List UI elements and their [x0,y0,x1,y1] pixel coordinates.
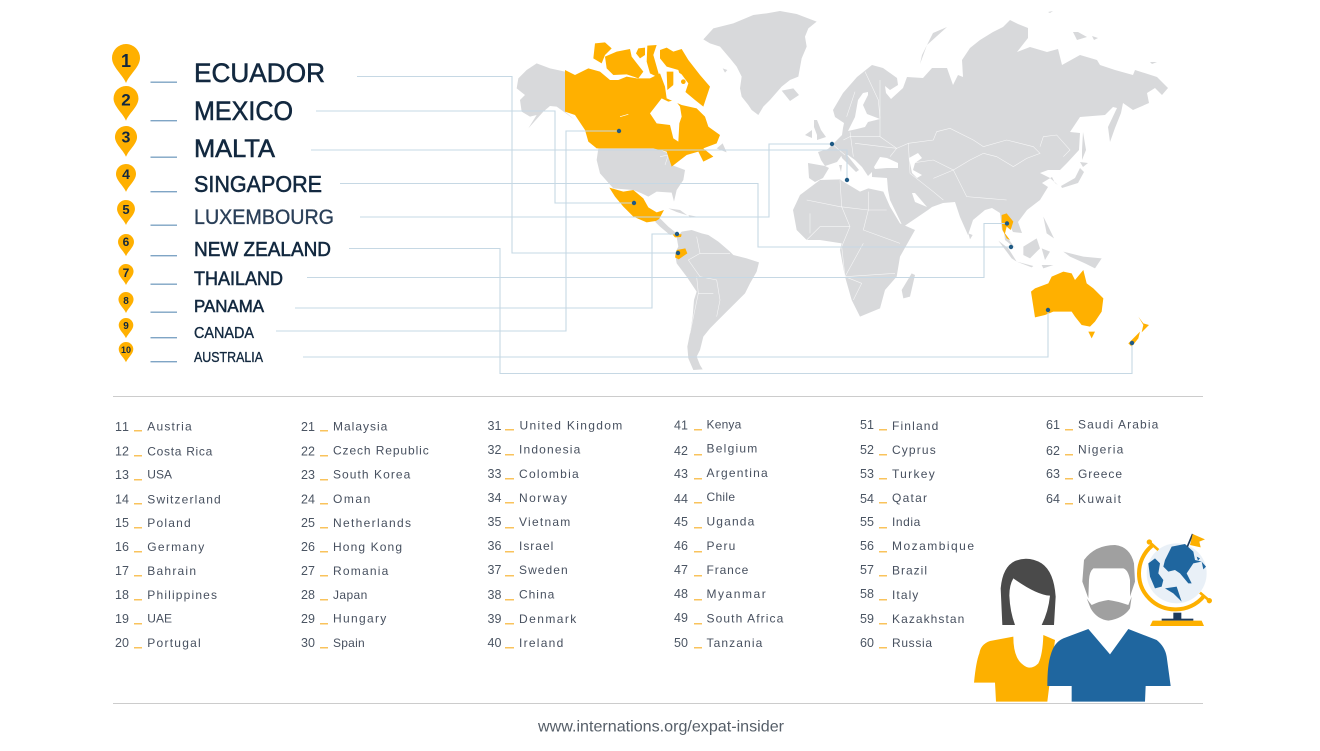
ranks 11 to 20: Costa Rica [147,444,213,458]
rank 9: Canada: 9 [123,321,129,332]
ranks 41 to 50: 42 [674,444,688,458]
ranks 51 to 60: 55 [860,515,874,529]
Central America and Caribbean [655,208,697,235]
ranks 41 to 50: Uganda [706,515,755,529]
map: Eurasia [805,11,1168,248]
rank 8: Panama: 8 [123,296,129,307]
ranks 51 to 60: 56 [860,539,874,553]
ranks 41 to 50: 47 [674,563,688,577]
South America [675,230,759,370]
ranks 41 to 50: Kenya [706,418,742,432]
ranks 11 to 20: 19 [115,612,129,626]
ranks 61 to 64: Kuwait [1078,492,1122,506]
rank 7: Thailand: THAILAND [194,269,283,290]
ranks 51 to 60: Russia [892,636,932,650]
Mexico [609,188,664,222]
ranks 21 to 30 [301,420,429,650]
rank 4: Singapore: SINGAPORE [194,171,322,197]
ranks 31 to 40: 39 [488,612,502,626]
ranks 41 to 50: Peru [706,539,735,553]
ranks 11 to 20: 11 [115,420,129,434]
ranks 51 to 60: India [892,515,921,529]
ranks 41 to 50: Belgium [706,442,757,456]
ranks 41 to 50: Chile [706,490,735,504]
rank 9: Canada [119,318,255,342]
ranks 51 to 60: 57 [860,563,874,577]
New Zealand [1128,317,1149,347]
Africa [793,179,915,317]
ranks 41 to 50: 45 [674,515,688,529]
ranks 51 to 60: Italy [892,588,918,602]
ranks 11 to 20: UAE [147,612,172,626]
ranks 21 to 30: Japan [333,588,367,602]
rank 10: Australia: 10 [121,345,131,355]
ranks 11 to 20: 15 [115,516,129,530]
ranks 31 to 40: 37 [488,563,502,577]
ranks 31 to 40: Colombia [519,467,579,481]
ranks 61 to 64: Nigeria [1078,443,1124,457]
ranks 21 to 30: Malaysia [333,420,388,434]
ranks 31 to 40: 38 [488,588,502,602]
ranks 41 to 50: Tanzania [706,636,763,650]
ranks 31 to 40: 34 [488,491,502,505]
ranks 21 to 30: 27 [301,564,315,578]
rank 10: Australia [119,342,263,366]
top divider [113,396,1203,397]
ranks 51 to 60: Mozambique [892,539,974,553]
ranks 41 to 50: 43 [674,467,688,481]
ranks 31 to 40: 35 [488,515,502,529]
ranks 41 to 50: 46 [674,539,688,553]
rank 3: Malta: MALTA [194,135,275,163]
ranks 51 to 60: 53 [860,467,874,481]
illustration: expats and globe [974,534,1212,702]
ranks 31 to 40: Sweden [519,563,568,577]
rank 10: Australia: AUSTRALIA [194,350,263,366]
ranks 11 to 20: Switzerland [147,492,221,506]
ranks 21 to 30: Netherlands [333,516,411,530]
ranks 51 to 60: 52 [860,443,874,457]
ranks 61 to 64: 61 [1046,418,1060,432]
ranks 51 to 60: 54 [860,492,874,506]
rank 5: Luxembourg: 5 [122,202,130,217]
connector lines [276,76,1132,374]
ranks 41 to 50: 49 [674,611,688,625]
rank 8: Panama [118,292,264,316]
map: Canada [565,42,720,167]
ranks 41 to 50: 44 [674,492,688,506]
Alaska and USA [517,63,727,202]
ranks 11 to 20 [115,420,221,650]
rank 4: Singapore [116,164,322,197]
ranks 11 to 20: Philippines [147,588,217,602]
ranks 51 to 60: Turkey [892,467,935,481]
ranks 61 to 64: 63 [1046,467,1060,481]
rank 2: Mexico: MEXICO [194,96,293,126]
ranks 11 to 20: 18 [115,588,129,602]
ranks 51 to 60: Qatar [892,491,927,505]
rank 2: Mexico: 2 [121,90,131,110]
rank 3: Malta [115,126,275,163]
ranks 21 to 30: 30 [301,636,315,650]
Panama and Ecuador [672,233,687,259]
ranks 21 to 30: South Korea [333,468,411,482]
ranks 21 to 30: Oman [333,492,370,506]
rank 1: Ecuador: ECUADOR [194,58,325,88]
ranks 31 to 40: 32 [488,443,502,457]
ranks 31 to 40: 31 [488,419,502,433]
rank 9: Canada: CANADA [194,325,255,342]
ranks 11 to 20: Portugal [147,636,201,650]
ranks 41 to 50: 50 [674,636,688,650]
ranks 41 to 50: France [706,563,749,577]
ranks 51 to 60: 59 [860,612,874,626]
rank 3: Malta: 3 [122,130,131,146]
bottom divider [113,703,1203,704]
ranks 51 to 60: 58 [860,587,874,601]
ranks 51 to 60: 51 [860,418,874,432]
ranks 31 to 40: 40 [488,636,502,650]
ranks 21 to 30: 25 [301,516,315,530]
top ten ranking [112,44,334,366]
map: Africa, Asia islands, Oceania [793,72,1149,347]
ranks 31 to 40 [488,418,622,650]
ranks 11 to 20: 16 [115,540,129,554]
ranks 21 to 30: 24 [301,492,315,506]
ranks 21 to 30: 26 [301,540,315,554]
world map [517,11,1168,370]
ranks 31 to 40: Vietnam [519,515,570,529]
ranks 11 to 20: Bahrain [147,564,196,578]
rank 6: New Zealand [118,234,331,261]
inland seas [848,92,927,207]
ranks 51 to 60: Kazakhstan [892,612,964,626]
ranks 11 to 20: 13 [115,468,129,482]
ranks 21 to 30: Hungary [333,612,386,626]
ranks 11 to 20: Poland [147,516,191,530]
ranks 61 to 64 [1046,418,1159,506]
rank 7: Thailand [118,264,283,290]
ranks 31 to 40: 33 [488,467,502,481]
ranks 31 to 40: Norway [519,491,567,505]
woman [974,559,1056,702]
ranks 41 to 50: 41 [674,418,688,432]
rank 5: Luxembourg: LUXEMBOURG [194,205,334,229]
rank 2: Mexico [114,86,293,126]
rank 1: Ecuador [112,44,325,88]
ranks 21 to 30: Czech Republic [333,444,429,458]
ranks 31 to 40: Denmark [519,612,577,626]
ranks 31 to 40: 36 [488,539,502,553]
ranks 51 to 60: 60 [860,636,874,650]
rank 6: New Zealand: NEW ZEALAND [194,239,331,261]
Thailand [1002,213,1013,240]
ranks 11 to 20: 20 [115,636,129,650]
ranks 51 to 60: Brazil [892,564,927,578]
ranks 31 to 40: China [519,588,555,602]
rank 7: Thailand: 7 [123,266,130,280]
map: Americas [517,11,817,370]
ranks 41 to 50: Argentina [706,466,768,480]
Greenland and Iceland [703,11,817,115]
ranks 11 to 20: 12 [115,444,129,458]
ranks 61 to 64: 62 [1046,444,1060,458]
Southeast Asia islands [968,217,1102,268]
country borders [807,72,1070,300]
ranks 31 to 40: Indonesia [519,443,581,457]
ranks 21 to 30: Hong Kong [333,540,402,554]
ranks 61 to 64: Greece [1078,467,1122,481]
rank 5: Luxembourg [117,200,334,229]
ranks 61 to 64: Saudi Arabia [1078,418,1159,432]
ranks 31 to 40: Israel [519,539,553,553]
ranks 51 to 60: Cyprus [892,443,936,457]
rank 4: Singapore: 4 [122,166,130,182]
ranks 61 to 64: 64 [1046,492,1060,506]
ranks 11 to 20: 14 [115,492,129,506]
man [1047,545,1171,702]
ranks 51 to 60: Finland [892,419,938,433]
ranks 11 to 20: 17 [115,564,129,578]
ranks 31 to 40: United Kingdom [520,418,622,432]
ranks 21 to 30: 28 [301,588,315,602]
footer url: www.internations.org/expat-insider [537,719,785,736]
ranks 41 to 50: 48 [674,587,688,601]
rank 1: Ecuador: 1 [121,51,131,71]
ranks 51 to 60 [860,418,974,650]
ranks 21 to 30: 21 [301,420,315,434]
ranks 11 to 20: Austria [147,420,192,434]
ranks 21 to 30: Spain [333,636,365,650]
globe [1139,534,1212,626]
ranks 11 to 20: USA [147,468,172,482]
ranks 21 to 30: 23 [301,468,315,482]
ranks 41 to 50 [674,418,784,650]
Australia [1031,270,1103,338]
ranks 41 to 50: Myanmar [706,587,766,601]
rank 6: New Zealand: 6 [123,235,130,249]
ranks 41 to 50: South Africa [706,612,784,626]
ranks 21 to 30: 29 [301,612,315,626]
ranks 31 to 40: Ireland [519,636,563,650]
location dots [617,129,1134,345]
ranks 21 to 30: 22 [301,444,315,458]
ranks 21 to 30: Romania [333,564,389,578]
rank 8: Panama: PANAMA [194,296,264,316]
ranks 11 to 20: Germany [147,540,204,554]
